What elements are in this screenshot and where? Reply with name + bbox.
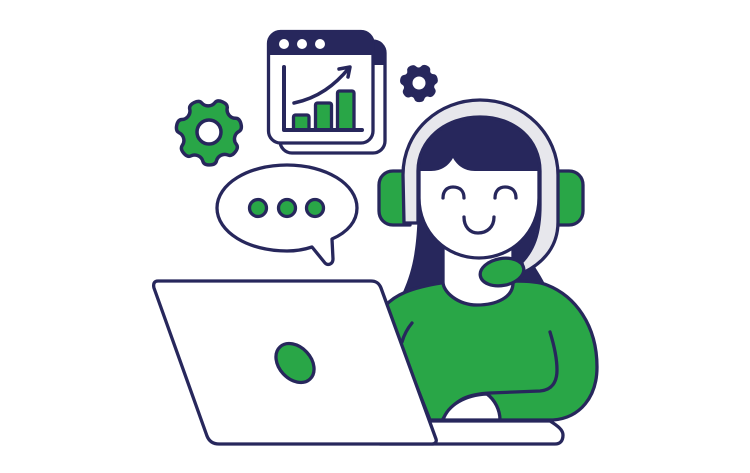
headphone ear cups <box>379 171 583 225</box>
green sweater <box>385 281 597 420</box>
laptop logo <box>268 336 322 390</box>
neck <box>443 240 513 305</box>
hair back <box>403 190 548 292</box>
speech bubble <box>217 165 357 264</box>
smile <box>464 217 494 233</box>
trend arrow <box>294 67 350 103</box>
face <box>419 170 539 258</box>
typing dots <box>250 200 324 216</box>
desk <box>380 421 563 444</box>
front window <box>268 31 373 143</box>
laptop <box>154 281 436 444</box>
hand <box>443 394 500 420</box>
hair fringe <box>418 117 541 171</box>
eyes <box>443 187 516 198</box>
icon: small navy gear <box>401 66 436 101</box>
microphone <box>478 255 526 289</box>
arm lines <box>402 323 557 419</box>
headband <box>403 100 558 273</box>
icon: green gear <box>176 101 241 165</box>
person <box>379 100 597 420</box>
bar chart <box>284 67 362 130</box>
chart window icon <box>268 31 385 153</box>
back window <box>280 41 385 153</box>
